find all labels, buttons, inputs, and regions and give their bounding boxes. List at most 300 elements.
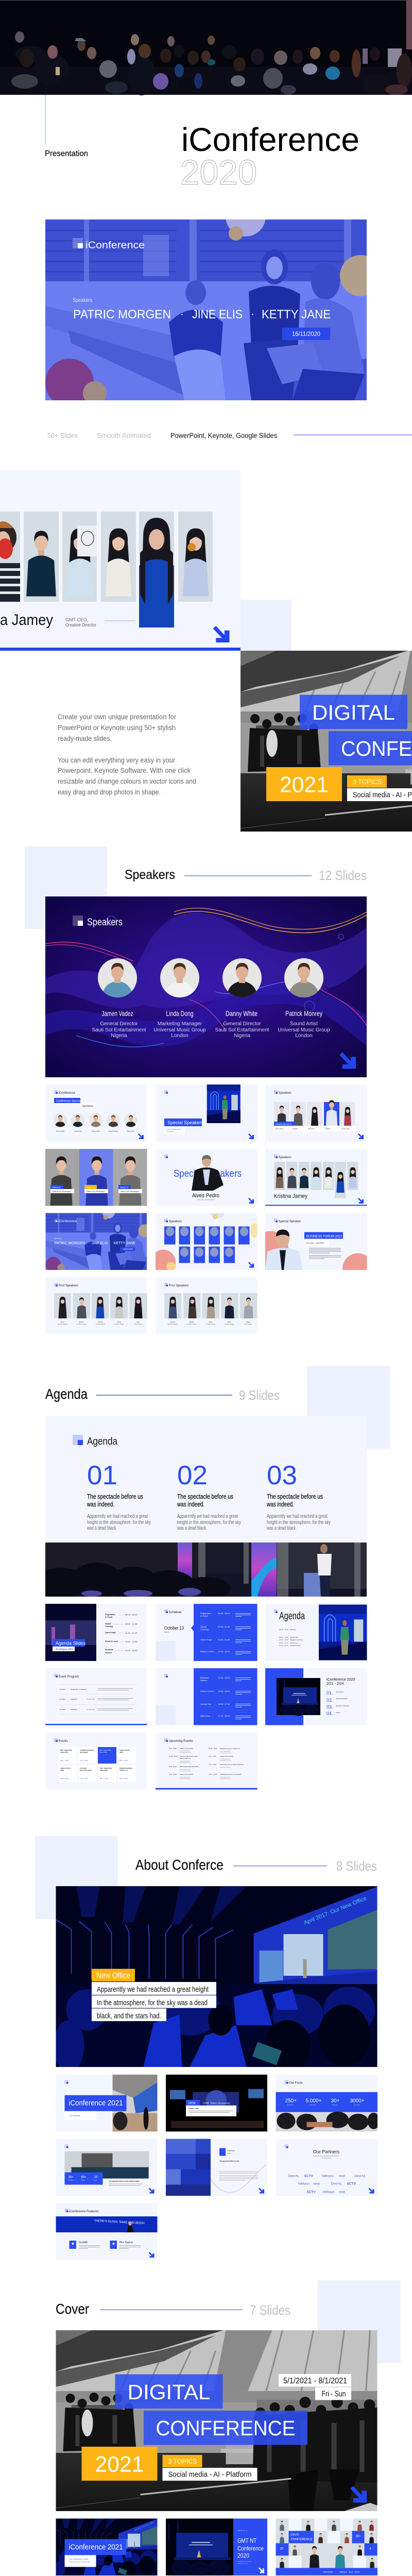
thumbnail: schedule continued: After Party [200, 1715, 210, 1717]
thumbnail: our facts: Your Title [353, 2104, 360, 2106]
callout: new office [92, 1969, 216, 2021]
thumbnail: first speakers A: YouTuber, Blogger [77, 1324, 87, 1325]
thumbnail: speakers five cards: Brad Pit [325, 1128, 331, 1130]
thumbnail: reception photo stats: Speakers [68, 2179, 74, 2181]
text block: presentation description: PowerPoint or Keynote using 50+ stylish [58, 723, 176, 732]
thumbnail: our partners: Hillhaus [298, 2182, 310, 2185]
section heading: Speakers: 12 Slides [319, 868, 367, 883]
date badges: 5/1/2021 - 8/1/2021 [283, 2377, 347, 2385]
thumbnail: upcoming events: 7:00 - 12:00 [209, 1764, 216, 1766]
panel: blue cover slide with speakers: iConference [85, 240, 145, 251]
thumbnail: conference special speakers: Patrick Monrey [109, 1130, 118, 1132]
agenda item 02: height in the atmosphere, for the sky [177, 1519, 242, 1526]
thumbnail: first speakers A: Jenny [117, 1321, 121, 1323]
thumbnail: first speakers B: YouTuber, Blogger [187, 1324, 197, 1325]
thumbnail: schedule October 13: October 13 [164, 1625, 184, 1631]
thumbnail: our partners: SCTV [304, 2174, 313, 2178]
text block: presentation description: Create your own unique presentation for [58, 713, 176, 721]
date badges: Fri - Sun [321, 2390, 346, 2399]
thumbnail: upcoming events: 9:00 - 16:00 [209, 1755, 216, 1757]
text block: presentation description: Powerpoint, Keynote Software. With one click [58, 766, 191, 774]
thumbnail: GMT NT Conference: GMT NT [237, 2537, 257, 2544]
thumbnail: special speakers Alves Pedro: Alves Pedro [192, 1193, 219, 1199]
speaker: Jamen Vadez: Sauti Sol Entartainment [92, 1027, 146, 1033]
thumbnail: first speakers A: YouTuber, Blogger [96, 1324, 106, 1325]
title blocks: DIGITAL [128, 2380, 210, 2404]
thumbnail: first speakers A [45, 1277, 147, 1334]
thumbnail: first speakers A: Music Blogger [134, 1324, 142, 1325]
speaker: Danny White: General Director [223, 1021, 261, 1027]
speaker: Linda Dong: Linda Dong [166, 1009, 194, 1018]
thumbnail: speakers team cards [265, 1149, 367, 1206]
callout: new office: New Office [96, 1971, 130, 1980]
thumbnail: our facts: 30+ [331, 2098, 340, 2104]
thumbnail: upcoming events: 10:00 - 15:00 [209, 1748, 217, 1750]
thumbnail: schedule October 13: Day 1 [164, 1631, 169, 1633]
thumbnail: agenda slides timeline: 12:40 - 13:30 [125, 1640, 138, 1643]
thumbnail: upcoming events: 11:00 - 20:00 [209, 1773, 217, 1775]
thumbnail: UI/UX conference people grid [276, 2518, 377, 2575]
thumbnail: agenda slides timeline: Breakout [105, 1649, 113, 1651]
thumbnail: three speakers columns: Henry Jr [86, 1186, 94, 1189]
thumbnail: first speakers B: Rose [209, 1321, 213, 1323]
presentation label with rule: Presentation [45, 149, 88, 158]
thumbnail: iConference 2020 agenda list [265, 1668, 367, 1725]
thumbnail: conference special speakers: Linda Dong [74, 1130, 82, 1132]
thumbnail: upcoming events: Digital Ecosystems Industry 4.0 [220, 1748, 240, 1750]
panel: about conference stage slide [56, 1886, 377, 2067]
panel: Kristina Jamey team photos [0, 470, 291, 651]
thumbnail: events cards: 8:00 - 15:00 [60, 1759, 68, 1761]
thumbnail: special speaker business forum: 5/1/2021 - 8/1/2021 [306, 1242, 324, 1244]
thumbnail: agenda slides timeline: 08:00 - 09:00 [125, 1614, 138, 1616]
thumbnail: UI/UX conference people grid: UI/UX [290, 2533, 299, 2536]
thumbnail: events cards: 8:00 - 16:00 [119, 1777, 128, 1780]
thumbnail: UI/UX conference people grid: 10 [280, 2547, 284, 2550]
thumbnail: speakers five cards: Karl Antony [308, 1128, 315, 1130]
speaker: Linda Dong: Marketing Manager [158, 1021, 202, 1027]
section heading: About Conferce: About Conferce [135, 1857, 224, 1873]
thumbnail: schedule October 13: to Event [200, 1615, 209, 1617]
speaker: Danny White: Nigeria [234, 1033, 250, 1039]
thumbnail: iConference 2020 agenda list: Dinner [336, 1711, 340, 1714]
thumbnail: event program: 10:30am [60, 1688, 66, 1690]
agenda item 02: 02 [177, 1461, 208, 1490]
thumbnail: events cards: 2020 [60, 1769, 64, 1771]
thumbnail: events cards: Show 2020 [60, 1751, 68, 1753]
thumbnail: our facts [276, 2075, 377, 2132]
text block: presentation description: ready-made slides. [58, 734, 112, 742]
thumbnail: iConference 2020 agenda list: Opening Speech [336, 1698, 348, 1700]
panel: agenda slide: Agenda [87, 1436, 118, 1447]
thumbnail: schedule continued: 15:00 - 16:00 [218, 1690, 230, 1692]
thumbnail: schedule October 13: Registration [200, 1612, 211, 1615]
thumbnail: conference special speakers: Danny Park [127, 1130, 135, 1132]
thumbnail: schedule October 13: Learning [200, 1628, 209, 1631]
thumbnail: events cards: 7:00 - 12:00 [80, 1759, 88, 1761]
year and topics: Social media - AI - Platform [168, 2470, 251, 2479]
thumbnail: our facts: Our Facts [289, 2082, 302, 2085]
thumbnail: collage with date: 10/05/2020 [227, 2149, 235, 2151]
speaker: Danny White [215, 958, 269, 1039]
panel: blue cover slide with speakers [45, 219, 367, 400]
thumbnail: LINE Token Economy stage: LINE Token Economy [203, 2102, 230, 2105]
thumbnail: iConference 2020 agenda list: Speakers Interview [336, 1705, 349, 1707]
agenda item 01: 01 [87, 1461, 117, 1490]
agenda item 02: was a dead black. [177, 1525, 207, 1531]
thumbnail: upcoming events: 8:00 - 15:00 [169, 1748, 177, 1750]
panel: blue cover slide with speakers: · [180, 309, 184, 320]
section heading: Speakers [25, 846, 367, 929]
thumbnail: our partners: neat [313, 2182, 320, 2185]
thumbnail: speakers grid [156, 1213, 258, 1270]
speaker: Jamen Vadez: Nigeria [111, 1033, 127, 1039]
photo: keynote stage and audience [35, 1543, 367, 1600]
thumbnail: first speakers B: YouTuber, Blogger [206, 1324, 216, 1325]
thumbnail: first speakers A: Jessica [79, 1321, 84, 1323]
thumbnail: events cards [45, 1733, 147, 1790]
date badge: 16/11/2020 [292, 330, 320, 337]
thumbnail: agenda list with stage [265, 1604, 367, 1661]
thumbnail: event program: 10:30am [60, 1698, 66, 1700]
panel: digital conference slide preview: 2021 [280, 773, 329, 798]
thumbnail: upcoming events: Adobe Summit 2020 [180, 1748, 193, 1750]
thumbnail: iConference 2021 cover [56, 2518, 158, 2575]
thumbnail: upcoming events: 10:00 - 19:00 [169, 1755, 178, 1757]
agenda item 03: The spectacle before us [267, 1493, 323, 1500]
thumbnail: blue cover slide: PATRIC MORGEN [55, 1241, 85, 1245]
thumbnail: upcoming events: Upcoming Events [169, 1740, 193, 1743]
thumbnail: events cards: 2020 [119, 1751, 123, 1753]
thumbnail: agenda slides timeline: Registration [105, 1614, 115, 1616]
thumbnail: first speakers A: First Speakers [59, 1284, 78, 1287]
thumbnail: our partners: DevrAL [331, 2182, 342, 2185]
thumbnail: schedule continued: Breakout [200, 1676, 209, 1679]
thumbnail: agenda slides timeline: Agenda Slides [56, 1640, 86, 1646]
thumbnail: event program: FastWork [71, 1708, 77, 1710]
thumbnail: conference special speakers: Conference Special [56, 1099, 81, 1103]
panel: Kristina Jamey team photos: GMT CEO, [65, 617, 88, 622]
thumbnail: GMT NT Conference: Reboot Homes [237, 2562, 248, 2564]
agenda item 01 [87, 1461, 151, 1531]
thumbnail: speakers five cards: Jr Patrick [292, 1128, 298, 1130]
thumbnail: iConference 2020 agenda list: 03. [327, 1704, 333, 1709]
thumbnail: special speakers stage: Danny Baker [167, 1131, 174, 1132]
thumbnail: LINE Token Economy stage: Subtitle is here [188, 2108, 199, 2110]
thumbnail: first speakers A: GMT CEO, Blogger [57, 1324, 67, 1325]
panel: agenda slide [45, 1416, 367, 1597]
thumbnail: schedule October 13: Schedule [169, 1611, 182, 1614]
thumbnail: first speakers B: Jessica [170, 1321, 175, 1323]
thumbnail: our partners: Apparently we had reached a great height in [313, 2155, 340, 2157]
thumbnail: our facts: 5.000+ [306, 2098, 322, 2104]
thumbnail: iConference 2021 hall: iConference 2021 [69, 2099, 123, 2108]
thumbnail: our partners: Hillhaus [321, 2174, 334, 2178]
thumbnail: upcoming events: 2020 Conference [180, 1757, 191, 1759]
thumbnail: special speakers stage: Special Speakers [167, 1120, 204, 1125]
thumbnail: UI/UX conference people grid: 4 [370, 2547, 372, 2550]
panel: Kristina Jamey team photos: a Jamey [0, 612, 53, 629]
thumbnail: schedule October 13: Garret Huge [200, 1638, 212, 1641]
agenda item 01: was indeed. [87, 1500, 114, 1508]
thumbnail: speakers five cards: Special Speakers [276, 1123, 291, 1125]
thumbnail: blue cover slide: Speakers [54, 1238, 62, 1240]
thumbnail: three speakers columns: Web & AI Developer [121, 1190, 140, 1193]
agenda item 03: Apparently we had reached a great [267, 1513, 328, 1519]
thumbnail: first speakers B: Davis [228, 1321, 231, 1323]
speaker: Linda Dong: London [171, 1033, 188, 1039]
thumbnail: schedule October 13: 11:30 - 12:40 [218, 1638, 230, 1641]
thumbnail: events cards: 8:00 - 15:00 [100, 1777, 108, 1780]
thumbnail: schedule continued: Jeremy Van [200, 1703, 211, 1705]
thumbnail: our facts: Members [310, 2104, 316, 2106]
title blocks: CONFERENCE [156, 2416, 296, 2440]
thumbnail: agenda list with stage: 18:30 - 19:30 Introduction [279, 1636, 298, 1638]
date badge [282, 328, 330, 340]
speaker: Jamen Vadez: General Director [100, 1021, 138, 1027]
thumbnail: first speakers B [156, 1277, 258, 1334]
agenda item 03 [266, 1461, 331, 1531]
thumbnail: iConference features [56, 2203, 158, 2260]
agenda item 03: height in the atmosphere, for the sky [267, 1519, 331, 1526]
panel: blue cover slide with speakers: · [251, 309, 254, 320]
thumbnail: reception photo stats [56, 2139, 158, 2196]
thumbnail: three speakers columns: Jones Jr [120, 1186, 128, 1189]
thumbnail: iConference features: Growth [78, 2241, 88, 2244]
thumbnail: iConference 2020 agenda list: iConference 2020 [327, 1678, 355, 1682]
thumbnail: speakers team cards: Kristina Jamey [274, 1193, 307, 1199]
speaker: Jamen Vadez [92, 958, 146, 1039]
speaker: Linda Dong: Universal Music Group [153, 1027, 206, 1033]
thumbnail: our facts: Partners [332, 2104, 338, 2106]
thumbnail: upcoming events: CIOSEE Symposium and Awards [220, 1773, 242, 1775]
thumbnail: upcoming events [156, 1733, 258, 1790]
callout: new office: In the atmosphere, for the sky was a dead [97, 1998, 208, 2007]
thumbnail: reception photo stats: Topics [81, 2179, 85, 2181]
thumbnail: events cards: Digital Ecosystems [119, 1767, 133, 1769]
thumbnail: first speakers A: Merilyn [98, 1321, 103, 1323]
panel: blue cover slide with speakers: JINE ELIS [192, 308, 243, 321]
thumbnail: LINE Token Economy stage: 2008 [188, 2102, 196, 2105]
agenda item 02: The spectacle before us [177, 1493, 233, 1500]
thumbnail: our partners: Our Partners [313, 2149, 340, 2155]
agenda item 02: Apparently we had reached a great [177, 1513, 238, 1519]
feature tabs: 50+ Slides [47, 431, 78, 439]
section heading: Cover [56, 2280, 401, 2363]
thumbnail: event program: FastWork [71, 1698, 77, 1700]
thumbnail: conference special speakers: Jamen Vadez [56, 1130, 65, 1132]
thumbnail: event program [45, 1668, 147, 1725]
thumbnail: events cards: Adobe Summit [119, 1749, 130, 1751]
year and topics: 3 TOPICS [168, 2457, 197, 2465]
section heading: Agenda: Agenda [45, 1386, 88, 1402]
thumbnail: schedule October 13: 09:00 - 11:30 [218, 1625, 230, 1628]
panel: blue cover slide with speakers: KETTY JANE [262, 308, 331, 321]
thumbnail: event program: Central Hall [87, 1698, 95, 1700]
thumbnail: our facts: 3000+ [350, 2098, 365, 2104]
thumbnail: upcoming events: NRF: Retail's Big Show 2020 [180, 1766, 198, 1768]
thumbnail: UI/UX conference people grid: Hillhaus neat SCTV [340, 2570, 360, 2573]
thumbnail: iConference 2020 agenda list: 2/21 - 2/24 [327, 1682, 344, 1686]
thumbnail: three speakers columns: Clarkson [52, 1186, 60, 1189]
thumbnail: special speaker business forum: Special Speaker [278, 1220, 301, 1223]
thumbnail: agenda slides timeline [45, 1604, 147, 1661]
agenda item 01: The spectacle before us [87, 1493, 143, 1500]
agenda item 03: 03 [267, 1461, 297, 1490]
thumbnail: agenda slides timeline: 13:30 - 15:00 [125, 1649, 138, 1652]
thumbnail: UI/UX conference people grid: 30+ [355, 2535, 361, 2538]
panel: speakers wave slide: Speakers [87, 917, 123, 928]
thumbnail: iConference 2020 agenda list: 02. [327, 1698, 333, 1703]
agenda item 01: was a dead black. [87, 1525, 117, 1531]
speaker: Patrick Monrey: Universal Music Group [278, 1027, 330, 1033]
thumbnail: schedule continued: Season [200, 1679, 208, 1682]
thumbnail: reception photo stats: 10 [94, 2176, 98, 2179]
thumbnail: three speakers columns: Web & AI Developer [53, 1190, 72, 1193]
thumbnail: special speakers stage [156, 1084, 258, 1142]
panel: speakers wave slide [45, 896, 367, 1077]
thumbnail: events cards: Show 2020 [100, 1769, 108, 1771]
section heading: Speakers: Speakers [125, 868, 175, 882]
thumbnail: events cards: and Awards [80, 1751, 88, 1753]
title: iConference 2020: iConference [181, 121, 359, 158]
thumbnail: iConference 2021 cover: 1st Conference 2021 [69, 2557, 89, 2560]
thumbnail: schedule October 13: 12:40 - 13:30 [218, 1650, 230, 1653]
thumbnail: schedule October 13: Break & Lunch [200, 1650, 214, 1653]
thumbnail: agenda slides timeline: Break & Lunch [105, 1640, 118, 1642]
thumbnail: special speakers stage: UGT Company CEO [167, 1128, 181, 1130]
thumbnail: first speakers B: James [246, 1321, 251, 1323]
thumbnail: schedule October 13: Global [200, 1625, 207, 1628]
thumbnail: special speaker business forum [265, 1213, 367, 1270]
thumbnail: first speakers A: YouTuber, Blogger [114, 1324, 124, 1325]
thumbnail: our partners: neat [339, 2174, 345, 2178]
thumbnail: collage with date: The spectacle before us was [219, 2160, 239, 2162]
panel: Kristina Jamey team photos: Creative Director [65, 622, 96, 628]
thumbnail: conference special speakers: iConference [59, 1092, 76, 1095]
thumbnail: iConference 2020 agenda list: 01. [327, 1690, 333, 1696]
thumbnail: agenda slides timeline: Garret Huge [105, 1632, 116, 1634]
agenda item 01: Apparently we had reached a great [87, 1513, 148, 1519]
thumbnail: first speakers A: Lisa [136, 1321, 140, 1323]
thumbnail: first speakers B: Music Blogger [245, 1324, 252, 1325]
thumbnail: iConference 2021 hall [56, 2074, 158, 2132]
speaker: Jamen Vadez: Jamen Vadez [102, 1009, 133, 1018]
thumbnail: special speaker business forum: BUSINESS FORUM 2021 [306, 1235, 342, 1239]
thumbnail: speakers five cards [265, 1084, 367, 1142]
thumbnail: agenda list with stage: Agenda [279, 1611, 305, 1622]
thumbnail: upcoming events: 8:00 - 15:00 [169, 1766, 177, 1768]
panel: digital conference slide preview: DIGITAL [312, 701, 395, 724]
thumbnail: agenda slides timeline: Season [105, 1652, 112, 1654]
thumbnail: iConference 2021 hall: Sub Heading [69, 2115, 80, 2117]
thumbnail: GMT NT Conference [166, 2518, 267, 2575]
thumbnail: reception photo stats: 30+ [68, 2176, 74, 2179]
thumbnail: upcoming events: Technology Can be 2020 Conference [220, 1764, 244, 1766]
thumbnail: schedule October 13: 08:00 - 09:00 [218, 1612, 230, 1615]
thumbnail: events cards: Events [59, 1740, 68, 1743]
thumbnail: our partners: neat [339, 2191, 345, 2194]
thumbnail: event program: Central Hall [87, 1708, 95, 1710]
thumbnail: our facts: Speakers [287, 2104, 294, 2106]
thumbnail: events cards: 8:00 - 16:00 [119, 1759, 128, 1761]
section heading: Agenda: 9 Slides [239, 1387, 280, 1403]
thumbnail: iConference 2021 cover: iConference 2021 [69, 2543, 123, 2551]
panel: blue cover slide with speakers: Speakers [73, 297, 92, 303]
thumbnail: first speakers A: Jenny [60, 1321, 64, 1323]
thumbnail: first speakers B: GMT CEO, Blogger [167, 1324, 178, 1325]
thumbnail: our facts: 250+ [285, 2098, 297, 2104]
hero photo: conference audience [0, 0, 412, 95]
thumbnail: conference special speakers: Speakers [82, 1105, 94, 1108]
title blocks [115, 2374, 307, 2445]
speaker: Patrick Monrey: London [295, 1033, 313, 1039]
thumbnail: speakers grid: Speakers [169, 1220, 182, 1223]
section heading: About Conferce [35, 1836, 377, 1919]
thumbnail: events cards: Show 2020 [99, 1751, 107, 1753]
thumbnail: agenda slides timeline: to Event [105, 1616, 113, 1618]
thumbnail: our partners [276, 2139, 377, 2196]
title: iConference 2020: 2020 [180, 153, 257, 192]
thumbnail: agenda slides timeline: 09:00 - 11:30 [125, 1623, 138, 1625]
callout: new office: black, and the stars had. [97, 2011, 161, 2021]
thumbnail: schedule continued [156, 1668, 258, 1725]
thumbnail: schedule continued: 17:40 - 20:00 [218, 1715, 230, 1717]
thumbnail: special speakers Alves Pedro [156, 1149, 258, 1206]
thumbnail: our partners: DevrAL [354, 2174, 366, 2178]
thumbnail: agenda slides timeline: 11:30 - 12:40 [125, 1632, 138, 1634]
thumbnail: iConference 2020 agenda list: Introduction [336, 1691, 344, 1693]
thumbnail: UI/UX conference people grid: PARTNERS [323, 2571, 333, 2573]
feature tabs: PowerPoint, Keynote, Google Slides [170, 431, 277, 439]
thumbnail: iConference 2021 cover: Between 20 sets 2 until 12/01/2021 [69, 2561, 91, 2563]
speaker: Patrick Monrey [278, 958, 330, 1039]
speaker: Patrick Monrey: Patrick Monrey [285, 1009, 322, 1018]
thumbnail: agenda list with stage: 19:30 - 20:30 Speakers Interview [279, 1639, 303, 1641]
thumbnail: upcoming events: Consumer Electronics Show [180, 1755, 198, 1757]
agenda item 03: was indeed. [266, 1500, 294, 1508]
section heading: About Conferce: 8 Slides [336, 1858, 377, 1874]
panel: digital conference cover slide [56, 2330, 377, 2511]
thumbnail: GMT NT Conference: January 15 - 21 [237, 2529, 248, 2531]
agenda item 03: was a dead black. [266, 1525, 297, 1531]
thumbnail: events cards: NRF: Retail's Big [60, 1749, 72, 1751]
thumbnail: events cards: Consumer [80, 1767, 87, 1769]
thumbnail: event program: 10:30am [60, 1708, 66, 1710]
thumbnail: reception photo stats: Days [94, 2179, 97, 2181]
thumbnail: iConference features: THERE'S SUSHI, SAKE AND BEER! [94, 2219, 145, 2225]
thumbnail: our partners: the atmosphere. [321, 2157, 331, 2159]
feature tabs: Smooth Animated [97, 431, 151, 439]
thumbnail: speakers team cards: Speakers [278, 1156, 291, 1159]
thumbnail: first speakers B: Patrick [190, 1321, 194, 1323]
thumbnail: agenda list with stage: 18:30 - 18:30 Meeting [279, 1629, 296, 1631]
thumbnail: events cards: Industry 4.0 [119, 1769, 128, 1771]
panel: blue cover slide with speakers: PATRIC MORGEN [73, 308, 171, 321]
thumbnail: agenda slides timeline: Developers 2021 [56, 1648, 74, 1651]
thumbnail: iConference features: iConference Features [69, 2210, 99, 2213]
thumbnail: blue cover slide: JINE ELIS [92, 1241, 108, 1245]
thumbnail: event program: Event Program [59, 1675, 79, 1679]
thumbnail: GMT NT Conference: 2020 [237, 2552, 249, 2559]
thumbnail: speakers five cards: Angelina Hgn [341, 1128, 350, 1130]
thumbnail: first speakers B: First Speakers [169, 1284, 188, 1287]
thumbnail: speakers five cards: Danny White [276, 1128, 283, 1130]
presentation label with rule [45, 95, 88, 158]
thumbnail: our partners: SCTV [307, 2191, 316, 2194]
thumbnail: upcoming events: Adobe Summit 2020 [220, 1755, 233, 1757]
text block: presentation description: resizable and change colours in vector icons and [58, 777, 196, 785]
